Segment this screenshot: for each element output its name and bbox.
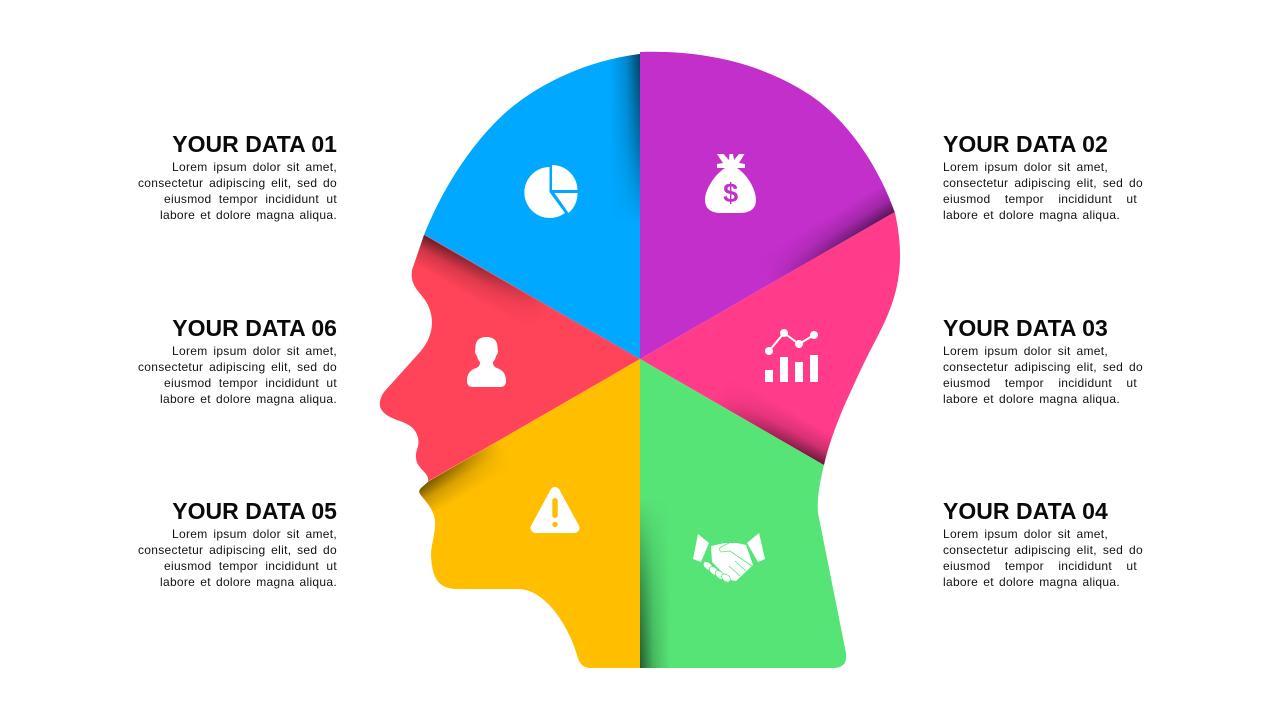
text block: your data 05: consectetur adipiscing elit, sed do <box>138 543 337 557</box>
icon: handshake <box>693 533 765 584</box>
text block: your data 02 <box>943 131 1143 222</box>
text block: your data 01: eiusmod tempor incididunt ut <box>164 192 337 206</box>
text block: your data 01: labore et dolore magna aliqua. <box>160 208 337 222</box>
text block: your data 06: Lorem ipsum dolor sit amet, <box>172 344 337 358</box>
text block: your data 05: Lorem ipsum dolor sit amet, <box>172 527 337 541</box>
text block: your data 06: consectetur adipiscing elit, sed do <box>138 360 337 374</box>
segment 01: blue <box>424 54 640 359</box>
text block: your data 04: eiusmod tempor incididunt ut <box>943 559 1137 573</box>
text block: your data 02: consectetur adipiscing elit, sed do <box>943 176 1143 190</box>
text block: your data 05: YOUR DATA 05 <box>172 498 337 524</box>
icon: warning triangle <box>536 492 574 528</box>
text block: your data 06: labore et dolore magna aliqua. <box>160 392 337 406</box>
text block: your data 02: Lorem ipsum dolor sit amet, <box>943 160 1108 174</box>
text block: your data 04: YOUR DATA 04 <box>943 498 1108 524</box>
text block: your data 01: YOUR DATA 01 <box>172 131 337 157</box>
text block: your data 03: YOUR DATA 03 <box>943 315 1108 341</box>
icon: money bag: $ <box>723 178 738 208</box>
text block: your data 01: Lorem ipsum dolor sit amet, <box>172 160 337 174</box>
text block: your data 01: consectetur adipiscing elit, sed do <box>138 176 337 190</box>
text block: your data 06: eiusmod tempor incididunt ut <box>164 376 337 390</box>
text block: your data 01 <box>138 131 337 222</box>
text block: your data 04: consectetur adipiscing elit, sed do <box>943 543 1143 557</box>
text block: your data 02: YOUR DATA 02 <box>943 131 1108 157</box>
segment 03: pink <box>640 212 900 465</box>
segment 06: red <box>380 234 640 482</box>
icon: pie chart <box>524 165 578 218</box>
text block: your data 04: labore et dolore magna aliqua. <box>943 575 1120 589</box>
icon: line and bar chart <box>765 329 818 382</box>
text block: your data 05: eiusmod tempor incididunt ut <box>164 559 337 573</box>
segment 04: green <box>640 359 846 668</box>
icon: money bag <box>705 154 756 213</box>
text block: your data 03: labore et dolore magna aliqua. <box>943 392 1120 406</box>
text block: your data 03 <box>943 315 1143 406</box>
text block: your data 06 <box>138 315 337 406</box>
text block: your data 05 <box>138 498 337 589</box>
text block: your data 04 <box>943 498 1143 589</box>
text block: your data 03: eiusmod tempor incididunt ut <box>943 376 1137 390</box>
icon: person <box>467 337 506 387</box>
text block: your data 02: eiusmod tempor incididunt ut <box>943 192 1137 206</box>
text block: your data 03: consectetur adipiscing elit, sed do <box>943 360 1143 374</box>
text block: your data 02: labore et dolore magna aliqua. <box>943 208 1120 222</box>
text block: your data 04: Lorem ipsum dolor sit amet, <box>943 527 1108 541</box>
text block: your data 05: labore et dolore magna aliqua. <box>160 575 337 589</box>
segment 02: purple <box>640 52 895 359</box>
segment 05: yellow <box>419 359 640 668</box>
text block: your data 06: YOUR DATA 06 <box>172 315 337 341</box>
head diagram <box>380 52 900 668</box>
text block: your data 03: Lorem ipsum dolor sit amet, <box>943 344 1108 358</box>
